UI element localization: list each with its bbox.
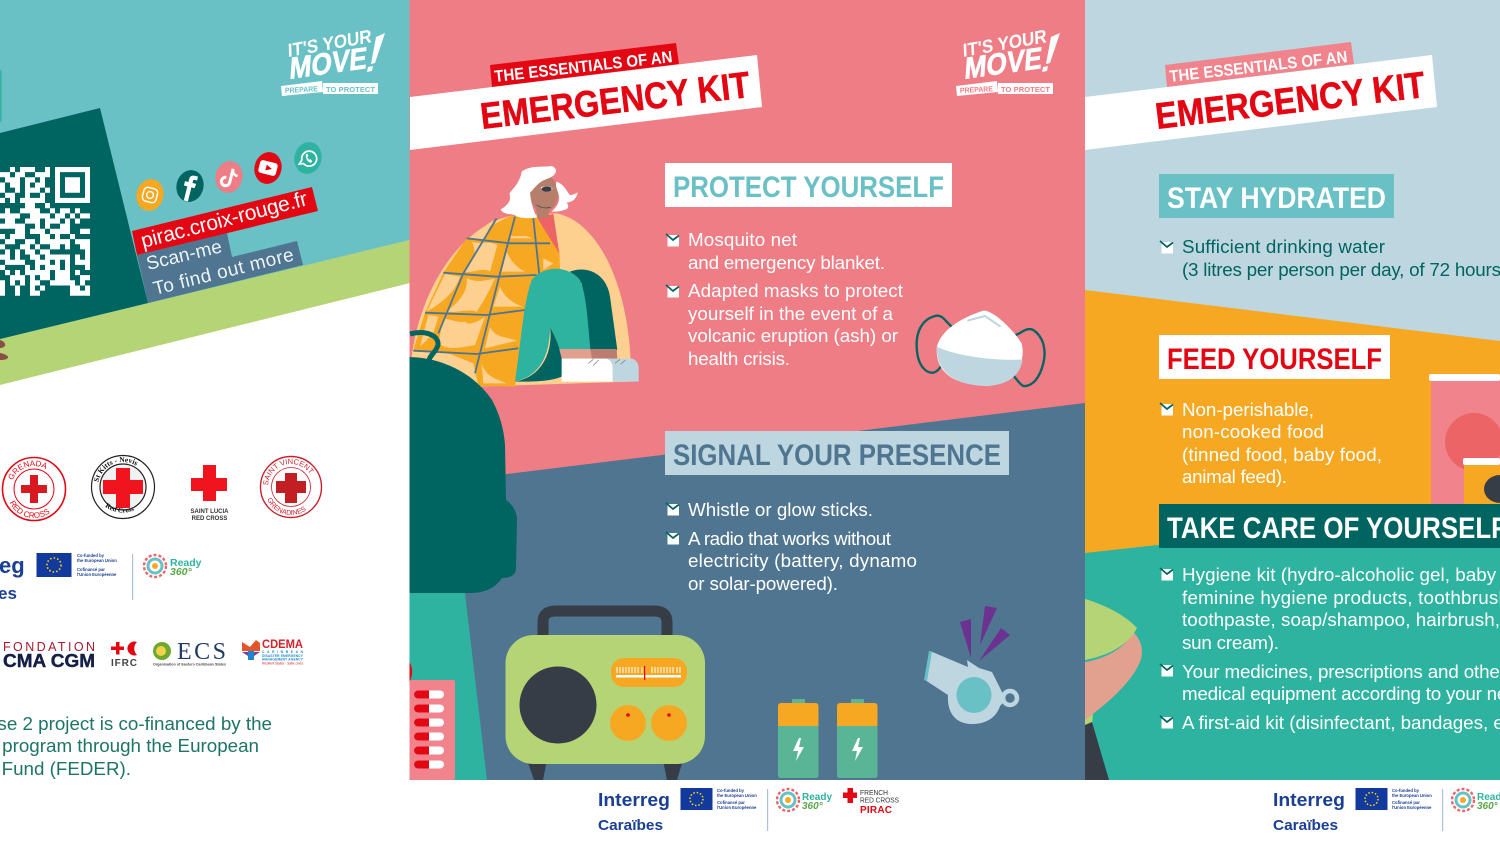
panel: left back cover — [0, 0, 410, 779]
logo: It's your move (middle): MOVE — [964, 42, 1043, 86]
illustration: whistle — [924, 606, 1017, 724]
title banner: EMERGENCY KIT — [478, 64, 752, 137]
list: feed yourself: Non-perishable, — [1182, 399, 1314, 420]
title banner: THE ESSENTIALS OF AN — [493, 48, 673, 86]
icon: checkbox — [1160, 241, 1173, 254]
logo: Fondation CMA CGM: CMA CGM — [3, 651, 95, 671]
icon: instagram — [133, 176, 167, 214]
heading: feed yourself: FEED YOURSELF — [1167, 343, 1382, 376]
website and scan call to action — [132, 187, 318, 303]
logo: EU co-funded: Cofinancé par — [717, 800, 745, 805]
partner logos row (left): Cofinancé par — [77, 567, 105, 572]
list: stay hydrated — [1160, 236, 1500, 280]
list: feed yourself: non-cooked food — [1182, 421, 1324, 442]
logo: Saint Vincent and the Grenadines Red Cross: GRENADINES — [268, 498, 306, 515]
illustration: teal figure and backpack — [410, 333, 517, 780]
logo: EU co-funded: the European Union — [717, 793, 757, 798]
footer logos: right page: Interreg — [1273, 790, 1345, 810]
logo: Interreg Caraïbes: Interreg — [598, 790, 670, 810]
list: signal your presence: or solar-powered). — [688, 573, 838, 594]
list: feed yourself: animal feed). — [1182, 466, 1287, 487]
footer logos: middle page — [410, 780, 1500, 844]
list: take care of yourself — [1160, 564, 1500, 733]
logo: It's your move (left): IT'S YOUR — [287, 25, 372, 61]
website and scan call to action: Scan-me — [144, 236, 224, 275]
logo: Ready 360 — [777, 789, 832, 812]
logo: Interreg Caraïbes: Caraïbes — [598, 817, 663, 834]
partner logos row (left): 360° — [170, 566, 193, 578]
list: signal your presence: A radio that works without — [688, 528, 892, 549]
footer logos: right page: Cofinancé par — [1392, 800, 1420, 805]
logo: Ready 360: 360° — [802, 801, 824, 812]
list: protect yourself: Adapted masks to protect — [688, 280, 904, 301]
title banner — [410, 43, 762, 150]
logo: It's your move (left): PREPARE — [285, 84, 318, 95]
logo: Saint Vincent and the Grenadines Red Cross: SAINT VINCENT — [263, 458, 314, 486]
icon: checkbox — [666, 285, 679, 298]
logo: IFRC: IFRC — [111, 658, 137, 669]
heading: feed yourself — [1159, 335, 1390, 379]
icon: checkbox — [666, 234, 679, 246]
logo: French Red Cross PIRAC: FRENCH — [860, 788, 888, 797]
list: signal your presence — [666, 499, 917, 594]
icon: checkbox — [1160, 664, 1173, 676]
icon: checkbox — [1160, 403, 1173, 416]
footer logos: right page: Caraïbes — [1273, 817, 1338, 834]
icon: whatsapp — [291, 139, 325, 177]
panel: middle page — [410, 0, 1085, 780]
logo: It's your move (left): TO PROTECT — [326, 85, 375, 94]
icon: checkbox — [1160, 568, 1173, 580]
icon: tiktok — [212, 158, 246, 196]
icon: facebook — [173, 167, 207, 205]
logo: St Kitts Nevis Red Cross: Red Cross — [105, 502, 134, 513]
footer logos: right page: the European Union — [1392, 793, 1432, 798]
logo: OECS: ECS — [177, 639, 226, 665]
list: take care of yourself: Your medicines, prescriptions and other — [1182, 661, 1500, 682]
list: protect yourself: volcanic eruption (ash) or — [688, 325, 898, 346]
logo: Saint Vincent and the Grenadines Red Cross — [260, 456, 322, 518]
list: take care of yourself: toothpaste, soap/shampoo, hairbrush, — [1182, 609, 1500, 630]
illustration: face mask — [917, 311, 1045, 386]
social icons — [133, 139, 325, 214]
icon: checkbox — [666, 503, 679, 516]
website and scan call to action: To find out more — [151, 245, 296, 300]
logo: Fondation CMA CGM — [3, 640, 95, 671]
teal edge sliver — [0, 70, 2, 122]
icon: youtube — [251, 149, 285, 187]
list: stay hydrated: Sufficient drinking water — [1182, 236, 1385, 257]
list: signal your presence: Whistle or glow sticks. — [688, 499, 873, 520]
QR code — [0, 170, 90, 293]
heading: protect yourself: PROTECT YOURSELF — [673, 171, 944, 204]
logo: It's your move (middle): IT'S YOUR — [962, 25, 1047, 61]
partner logos row (left) — [0, 553, 202, 603]
list: protect yourself — [666, 229, 904, 369]
illustration: food jars — [1429, 374, 1500, 504]
list: protect yourself: health crisis. — [688, 348, 790, 369]
list: feed yourself — [1160, 399, 1382, 487]
illustration: radio — [506, 611, 705, 780]
logo: St Kitts Nevis Red Cross: St Kitts - Nevis — [94, 457, 138, 482]
footer logos: right page: Co-funded by — [1392, 788, 1420, 793]
logo: It's your move (left): MOVE — [289, 42, 368, 86]
list: protect yourself: and emergency blanket. — [688, 252, 885, 273]
logo: OECS — [153, 639, 226, 666]
list: take care of yourself: feminine hygiene products, toothbrush — [1182, 587, 1500, 608]
logo: EU co-funded: l'Union Européenne — [717, 805, 757, 810]
partner logos row (left): Co-funded by — [77, 553, 105, 558]
illustration: pill blister pack — [410, 662, 455, 780]
logo: CDEMA: DISASTER EMERGENCY — [262, 654, 304, 658]
logo: French Red Cross PIRAC — [843, 788, 899, 816]
logo: CDEMA: MANAGEMENT AGENCY — [262, 658, 304, 662]
logo: St Kitts Nevis Red Cross — [90, 454, 156, 520]
icon: checkbox — [666, 532, 679, 544]
funding statement — [0, 713, 272, 779]
logo: Grenada Red Cross: GRENADA — [8, 460, 46, 480]
partner logos row (left): the European Union — [77, 558, 117, 563]
QR code panel — [0, 108, 148, 339]
partner logos row (left): Ready — [170, 557, 202, 569]
logo: OECS: Organisation of Eastern Caribbean States — [153, 662, 226, 666]
list: signal your presence: electricity (battery, dynamo — [688, 550, 917, 571]
partner logos row (left): l'Union Européenne — [77, 572, 117, 577]
logo: It's your move (middle): PREPARE — [960, 84, 993, 95]
logo: CDEMA: Resilient States - Safer Lives — [262, 662, 303, 666]
logo: French Red Cross PIRAC: RED CROSS — [860, 796, 899, 804]
logo: Ready 360: Ready — [802, 792, 832, 803]
icon: checkbox — [1160, 716, 1173, 728]
illustration: batteries — [778, 699, 878, 778]
logo: EU co-funded: Co-funded by — [717, 788, 745, 793]
heading: signal your presence — [665, 431, 1009, 475]
illustration: person with hand on hip — [1085, 599, 1142, 780]
logo: EU co-funded — [680, 788, 757, 810]
logo: Grenada Red Cross — [2, 456, 66, 522]
website and scan call to action: pirac.croix-rouge.fr — [138, 187, 310, 253]
title banner: EMERGENCY KIT — [1153, 64, 1427, 137]
heading: signal your presence: SIGNAL YOUR PRESENCE — [673, 439, 1001, 472]
logo: CDEMA: CARIBBEAN — [262, 650, 304, 654]
heading: protect yourself — [665, 163, 952, 207]
list: protect yourself: yourself in the event of a — [688, 303, 894, 324]
logo: CDEMA: CDEMA — [262, 637, 303, 651]
logo: Fondation CMA CGM: FONDATION — [3, 640, 95, 654]
footer logos: right page: l'Union Européenne — [1392, 805, 1432, 810]
logo: Saint Lucia Red Cross: SAINT LUCIA — [190, 509, 229, 515]
list: take care of yourself: sun cream). — [1182, 632, 1279, 653]
title banner — [1085, 42, 1437, 150]
heading: stay hydrated: STAY HYDRATED — [1167, 182, 1386, 215]
tiny feet at edge — [0, 340, 8, 360]
logo: Grenada Red Cross: RED CROSS — [10, 500, 50, 518]
logo: IFRC — [111, 642, 137, 669]
logo: It's your move (left) — [281, 25, 385, 96]
logo: Saint Lucia Red Cross — [190, 465, 229, 522]
green diagonal band — [0, 240, 410, 385]
logo: Interreg Caraïbes — [598, 790, 670, 834]
logo: French Red Cross PIRAC: PIRAC — [860, 805, 892, 816]
logo: It's your move (middle) — [956, 25, 1060, 96]
logo: Saint Lucia Red Cross: RED CROSS — [192, 516, 227, 522]
list: protect yourself: Mosquito net — [688, 229, 798, 250]
footer logos: right page — [1273, 788, 1500, 834]
illustration: woman wrapped in emergency blanket — [412, 166, 639, 387]
logo: CDEMA — [242, 637, 304, 666]
title banner: THE ESSENTIALS OF AN — [1168, 48, 1348, 86]
logo: It's your move (middle): TO PROTECT — [1001, 85, 1050, 94]
list: feed yourself: (tinned food, baby food, — [1182, 444, 1382, 465]
heading: stay hydrated — [1159, 174, 1394, 218]
footer logos: right page: 360° — [1477, 801, 1499, 812]
list: stay hydrated: (3 litres per person per day, of 72 hours) — [1182, 259, 1500, 280]
panel: right page — [1085, 0, 1500, 780]
